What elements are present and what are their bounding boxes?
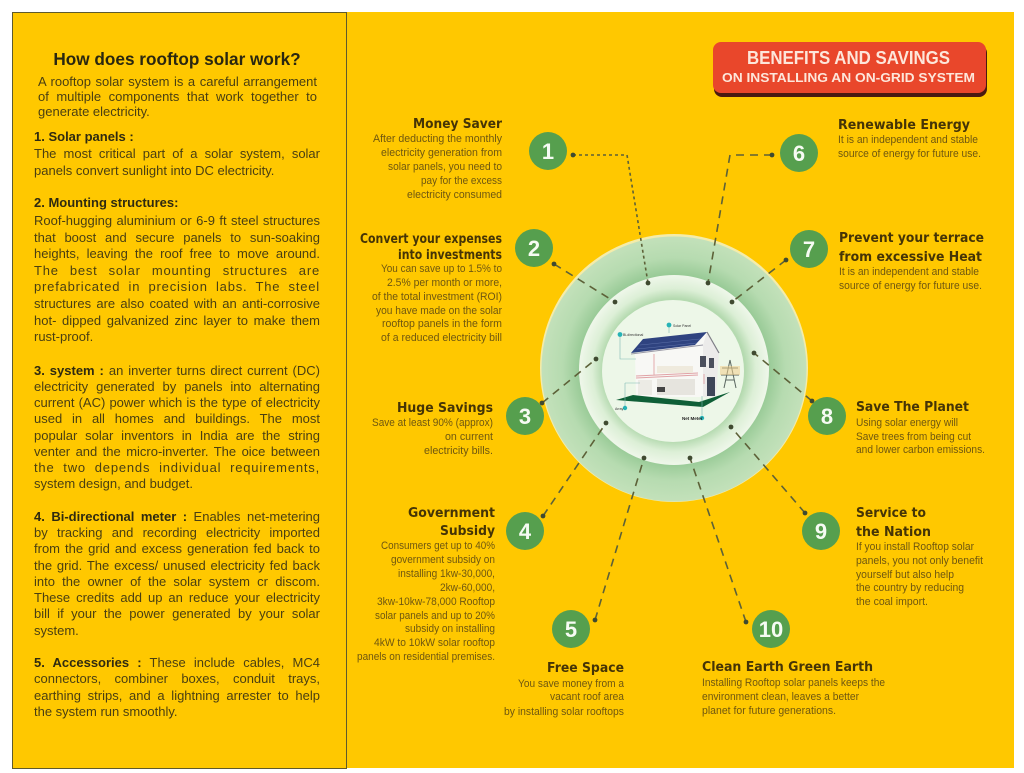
text block: mounting structures: hot- dipped galvanized zinc layer to make them — [34, 313, 320, 328]
text block: mounting structures: The best solar mounting structures are — [34, 263, 320, 278]
connector 7 — [730, 258, 788, 304]
badge 6 — [780, 134, 818, 172]
benefit 1: money saver: electricity consumed — [407, 189, 502, 201]
illustration: solar house: Bi-directional — [623, 333, 643, 337]
text block: mounting structures: that boost and secure panels to sun-soaking — [34, 230, 320, 245]
concentric circle diagram — [540, 234, 808, 502]
benefit 2: convert your expenses — [360, 231, 502, 344]
text block: mounting structures: heights, leaving the roof free to move around. — [34, 246, 320, 261]
benefit 1: money saver — [373, 116, 503, 201]
text block: mounting structures: rust-proof. — [34, 329, 93, 344]
benefit 4: government subsidy: subsidy on installing — [405, 623, 495, 635]
benefit 2: convert your expenses: of the total investment (ROI) — [372, 291, 502, 303]
benefit 5: free space — [504, 660, 624, 718]
benefit 10: clean earth green earth: environment clean, leaves a better — [702, 691, 859, 703]
benefit 1: money saver: solar panels, you need to — [388, 161, 502, 173]
badge 1 — [529, 132, 567, 170]
badge 4: 4 — [519, 519, 532, 544]
badge 7 — [790, 230, 828, 268]
text block: system inverter: used in all homes and buildings. The most — [34, 411, 320, 426]
benefit 1: money saver: pay for the excess — [421, 175, 502, 187]
text block: bi-directional meter — [34, 509, 320, 638]
benefit 9: service to the nation: the coal import. — [856, 596, 928, 608]
text block: solar panels: 1. Solar panels : — [34, 129, 134, 144]
text block: introduction: A rooftop solar system is a careful arrangement — [38, 74, 317, 89]
text block: system inverter: electricity generated by panels into alternating — [34, 379, 320, 394]
benefit 4: government subsidy: government subsidy on — [391, 554, 495, 566]
benefit 10: clean earth green earth: planet for future generations. — [702, 705, 836, 717]
benefit 9: service to the nation: the Nation — [856, 524, 931, 540]
connector 2 — [552, 262, 617, 304]
connector 10 — [688, 456, 748, 624]
text block: mounting structures: Roof-hugging aluminium or 6-9 ft steel structures — [34, 213, 320, 228]
text block: bi-directional meter: bill if your the power generated by your solar — [34, 606, 320, 621]
badge 3: 3 — [519, 404, 531, 429]
benefit 6: renewable energy — [838, 117, 981, 160]
benefit 9: service to the nation: If you install Rooftop solar — [856, 541, 974, 553]
benefit 2: convert your expenses: you have made on the solar — [376, 305, 502, 317]
benefit 4: government subsidy: Government — [408, 505, 495, 521]
illustration: solar house: Net Meter — [682, 416, 703, 421]
text block: system inverter: the two depends individual requirements, — [34, 460, 320, 475]
benefit 7: prevent your terrace: It is an independent and stable — [839, 266, 979, 278]
benefit 4: government subsidy: Consumers get up to 40% — [381, 540, 496, 552]
illustration: solar house — [615, 323, 740, 421]
badge 8: 8 — [821, 404, 833, 429]
benefit 3: huge savings — [372, 400, 493, 457]
text block: bi-directional meter: 4. Bi-directional meter : Enables net-metering — [34, 509, 320, 524]
badge 9 — [802, 512, 840, 550]
text block: bi-directional meter: from the grid and excess generation fed back to — [34, 541, 320, 556]
illustration: solar house: Array — [615, 407, 624, 411]
text block: system inverter: venter and the micro-inverter. The oice between — [34, 444, 320, 459]
connector 9 — [729, 425, 807, 515]
connector 8 — [752, 351, 814, 403]
benefit 5: free space: by installing solar rooftops — [504, 706, 624, 718]
banner: benefits and savings: ON INSTALLING AN ON-GRID SYSTEM — [722, 71, 975, 85]
text block: solar panels: The most critical part of a solar system, solar — [34, 146, 320, 161]
text block: introduction — [38, 74, 317, 119]
benefit 1: money saver: Money Saver — [413, 116, 502, 132]
benefit 6: renewable energy: It is an independent and stable — [838, 134, 978, 146]
benefit 8: save the planet: and lower carbon emissions. — [856, 444, 985, 456]
benefit 5: free space: You save money from a — [518, 678, 624, 690]
benefit 2: convert your expenses: You can save up to 1.5% to — [381, 263, 502, 275]
benefit 6: renewable energy: Renewable Energy — [838, 117, 970, 133]
badge 3 — [506, 397, 544, 435]
badge 5 — [552, 610, 590, 648]
icon: transmission tower — [720, 360, 740, 388]
text block: system inverter: current (AC) power which is the type of electricity — [34, 395, 320, 410]
text block: introduction: generate electricity. — [38, 104, 150, 119]
benefit 3: huge savings: Save at least 90% (approx) — [372, 417, 493, 429]
benefit 10: clean earth green earth — [702, 659, 885, 717]
benefit 7: prevent your terrace — [839, 230, 984, 292]
benefit 4: government subsidy: 4kW to 10kW solar rooftop — [374, 637, 495, 649]
text block: bi-directional meter: These credits add up an reduce your electricity — [34, 590, 320, 605]
connector 1 — [571, 153, 650, 285]
benefit 3: huge savings: Huge Savings — [397, 400, 493, 416]
text block: system inverter — [34, 363, 320, 491]
badge 4 — [506, 512, 544, 550]
benefit 4: government subsidy: 3kw-10kw-78,000 Rooftop — [377, 596, 495, 608]
benefit 5: free space: vacant roof area — [550, 691, 624, 703]
benefit 3: huge savings: on current — [445, 431, 493, 443]
benefit 4: government subsidy: Subsidy — [440, 523, 495, 539]
badge 10 — [752, 610, 790, 648]
benefit 2: convert your expenses: 2.5% per month or more, — [387, 277, 502, 289]
text block: bi-directional meter: the grid. The excess/ unused electricity fed back — [34, 558, 320, 573]
text block: mounting structures — [34, 195, 320, 344]
text block: bi-directional meter: into the owner of the solar system cr discom. — [34, 574, 320, 589]
banner: benefits and savings: BENEFITS AND SAVINGS — [747, 48, 950, 68]
benefit 4: government subsidy: panels on residential premises. — [357, 651, 495, 663]
badge 1: 1 — [542, 139, 554, 164]
benefit 2: convert your expenses: of a reduced electricity bill — [381, 332, 502, 344]
text block: accessories: the system run smoothly. — [34, 704, 178, 719]
benefit 7: prevent your terrace: Prevent your terrace — [839, 230, 984, 246]
benefit 4: government subsidy: installing 1kw-30,000, — [398, 568, 495, 580]
benefit 4: government subsidy: solar panels and up to 20% — [375, 610, 496, 622]
text block: solar panels: panels convert sunlight into DC electricity. — [34, 163, 274, 178]
illustration: solar house: Solar Panel — [673, 324, 691, 328]
benefit 9: service to the nation: yourself but also help — [856, 569, 954, 581]
banner: benefits and savings — [713, 42, 987, 97]
benefit 9: service to the nation: Service to — [856, 505, 926, 521]
connector 4 — [541, 421, 608, 518]
text block: bi-directional meter: system. — [34, 623, 79, 638]
benefit 10: clean earth green earth: Installing Rooftop solar panels keeps the — [702, 677, 885, 689]
benefit 4: government subsidy — [357, 505, 496, 663]
badge 7: 7 — [803, 237, 815, 262]
benefit 10: clean earth green earth: Clean Earth Green Earth — [702, 659, 873, 675]
text block: system inverter: popular solar inventors in India are the string — [34, 428, 320, 443]
benefit 2: convert your expenses: rooftop panels in the form — [382, 318, 502, 330]
badge 8 — [808, 397, 846, 435]
benefit 6: renewable energy: source of energy for future use. — [838, 148, 981, 160]
benefit 8: save the planet: Save trees from being cut — [856, 431, 971, 443]
benefit 5: free space: Free Space — [547, 660, 624, 676]
badge 5: 5 — [565, 617, 577, 642]
benefit 8: save the planet: Save The Planet — [856, 399, 969, 415]
badge 10: 10 — [759, 617, 783, 642]
text block: mounting structures: 2. Mounting structures: — [34, 195, 178, 210]
benefit 1: money saver: After deducting the monthly — [373, 133, 503, 145]
benefit 7: prevent your terrace: from excessive Heat — [839, 249, 983, 265]
benefit 7: prevent your terrace: source of energy for future use. — [839, 280, 982, 292]
text block: mounting structures: structures are also coated with an anti-corrosive — [34, 296, 320, 311]
text block: introduction: of multiple components that work together to — [38, 89, 317, 104]
badge 9: 9 — [815, 519, 827, 544]
text block: system inverter: system design, and budget. — [34, 476, 193, 491]
panel: how does rooftop solar work — [12, 12, 347, 769]
text block: accessories: connectors, combiner boxes, conduit trays, — [34, 671, 320, 686]
connector 3 — [540, 357, 598, 405]
badge 6: 6 — [793, 141, 805, 166]
heading: how does rooftop solar work: How does rooftop solar work? — [53, 49, 301, 69]
benefit 2: convert your expenses: Convert your expenses — [360, 231, 502, 247]
benefit 1: money saver: electricity generation from — [381, 147, 502, 159]
benefit 9: service to the nation — [856, 505, 983, 608]
text block: accessories — [34, 655, 320, 719]
text block: system inverter: 3. system : an inverter turns direct current (DC) — [34, 363, 320, 378]
text block: bi-directional meter: by tracking and recording electricity imported — [34, 525, 320, 540]
text block: accessories: earthing strips, and a lightning arrester to help — [34, 688, 320, 703]
badge 2 — [515, 229, 553, 267]
connector 6 — [706, 153, 774, 285]
benefit 4: government subsidy: 2kw-60,000, — [440, 582, 495, 594]
connector 5 — [593, 456, 646, 622]
badge 2: 2 — [528, 236, 540, 261]
benefit 8: save the planet: Using solar energy will — [856, 417, 958, 429]
text block: mounting structures: prefabricated in precision labs. The steel — [34, 279, 320, 294]
text block: accessories: 5. Accessories : These include cables, MC4 — [34, 655, 320, 670]
benefit 8: save the planet — [856, 399, 985, 456]
benefit 9: service to the nation: the country by reducing — [856, 582, 964, 594]
benefit 9: service to the nation: panels, you not only benefit — [856, 555, 983, 567]
benefit 2: convert your expenses: into investments — [398, 247, 502, 263]
benefit 3: huge savings: electricity bills. — [424, 445, 493, 457]
text block: solar panels — [34, 129, 320, 178]
